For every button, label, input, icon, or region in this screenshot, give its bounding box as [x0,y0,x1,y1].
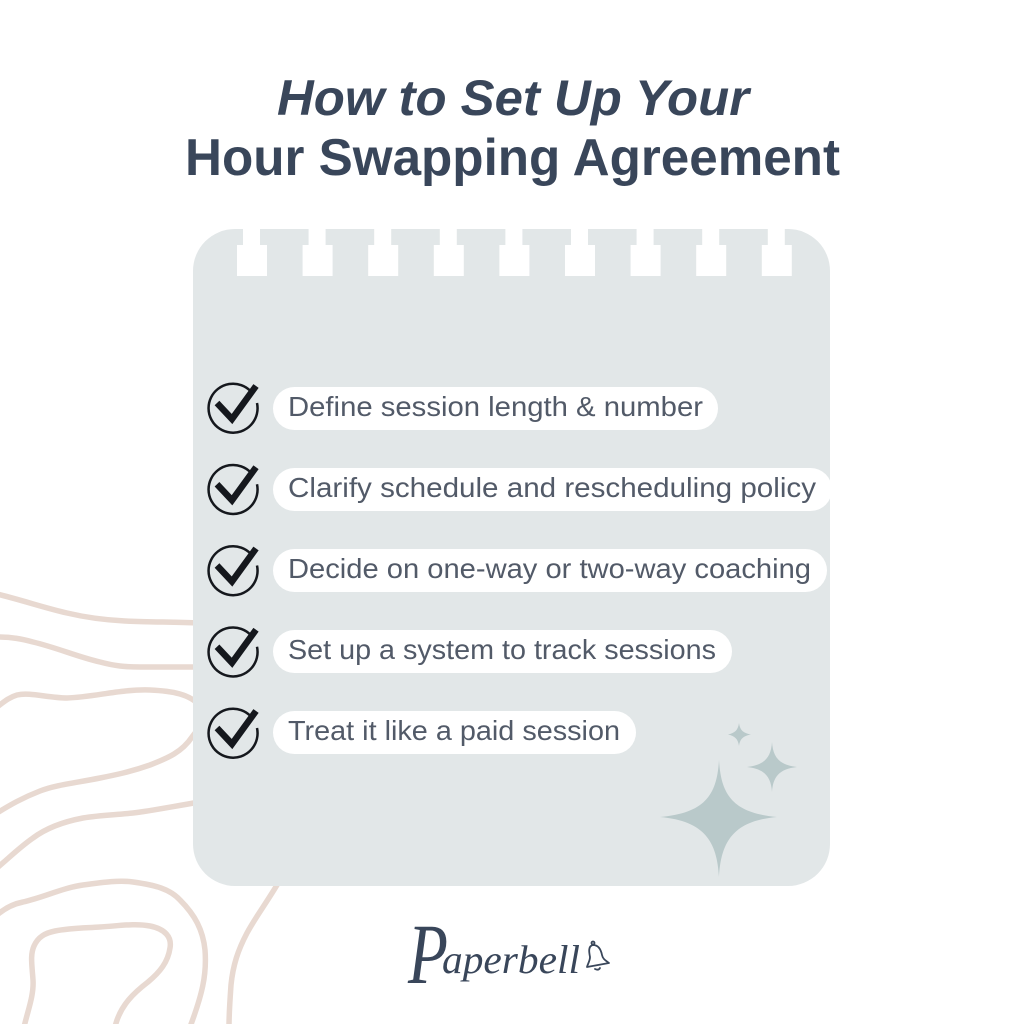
icon: sparkles [660,723,797,877]
checklist item 2 [209,465,832,514]
checklist item 5 [209,709,636,758]
logo: Paperbell: aperbell [442,937,580,982]
checklist item 3 [209,546,827,595]
checklist item 4: Set up a system to track sessions [288,634,716,665]
title: How to Set Up Your [277,70,752,126]
checklist item 1 [209,384,718,433]
logo: Paperbell: P [407,906,448,1002]
title [185,70,840,187]
title: Hour Swapping Agreement [185,129,840,187]
checklist item 3: Decide on one-way or two-way coaching [288,553,811,584]
checklist item 1: Define session length & number [288,391,703,422]
logo: Paperbell [407,906,609,1002]
decorative contour lines [0,594,277,1024]
panel: notepad [193,228,830,886]
icon: bell [587,942,609,970]
checklist item 5: Treat it like a paid session [288,715,620,746]
checklist item 2: Clarify schedule and rescheduling policy [288,472,816,503]
checklist item 4 [209,627,732,676]
